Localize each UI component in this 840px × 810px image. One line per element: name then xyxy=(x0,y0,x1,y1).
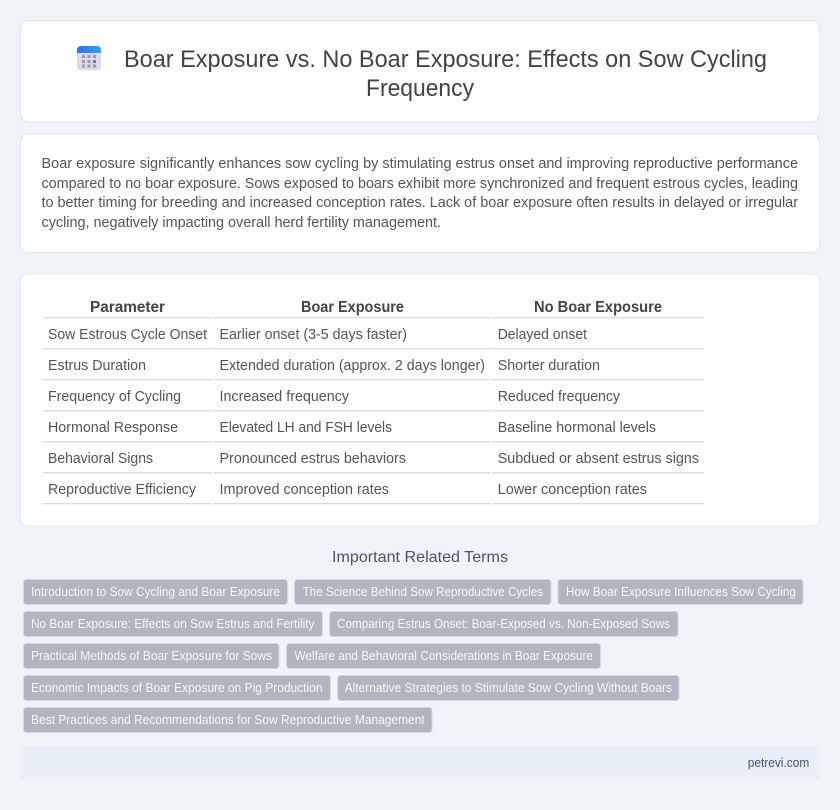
panel: title header xyxy=(20,20,820,122)
tag xyxy=(330,612,678,636)
table row: Estrus Duration: Estrus Duration xyxy=(48,358,146,374)
table row: Hormonal Response: Baseline hormonal levels xyxy=(498,420,656,436)
table row: Sow Estrous Cycle Onset xyxy=(48,327,587,343)
table row: Sow Estrous Cycle Onset: Sow Estrous Cycle Onset xyxy=(48,327,207,343)
tag xyxy=(24,580,288,604)
table row: Sow Estrous Cycle Onset: Earlier onset (3-5 days faster) xyxy=(220,327,407,343)
footer source text: petrevi.com xyxy=(748,756,809,770)
tag xyxy=(286,644,600,668)
text block: introduction paragraph: compared to no boar exposure. Sows exposed to boars exhibit more synchronized and frequent estrous cycles, leading xyxy=(42,176,798,192)
tag xyxy=(24,644,279,668)
table row: Behavioral Signs: Subdued or absent estrus signs xyxy=(498,451,699,467)
title: Frequency xyxy=(366,75,474,102)
tag: Practical Methods of Boar Exposure for Sows xyxy=(31,649,272,663)
tag: How Boar Exposure Influences Sow Cycling xyxy=(566,585,796,599)
table row: Behavioral Signs xyxy=(48,451,699,467)
panel: comparison table xyxy=(20,274,820,526)
table row: Behavioral Signs: Pronounced estrus behaviors xyxy=(220,451,406,467)
title xyxy=(124,46,767,102)
table header row xyxy=(90,299,662,316)
text block: introduction paragraph: to better timing for breeding and increased conception rates. Lack of boar exposure often results in delayed or irregular xyxy=(42,195,798,211)
tag: Alternative Strategies to Stimulate Sow Cycling Without Boars xyxy=(345,681,672,695)
icon: calendar xyxy=(77,46,101,70)
tag xyxy=(24,708,432,732)
text block: introduction paragraph: cycling, negatively impacting overall herd fertility management. xyxy=(42,215,441,231)
table row: Frequency of Cycling xyxy=(48,389,621,405)
table row: Behavioral Signs: Behavioral Signs xyxy=(48,451,153,467)
text block: introduction paragraph xyxy=(42,156,798,231)
table header row: Boar Exposure xyxy=(301,299,404,316)
table row: Reproductive Efficiency: Improved conception rates xyxy=(220,482,389,498)
panel: introduction xyxy=(20,134,820,252)
heading: Important Related Terms: Important Related Terms xyxy=(332,549,508,566)
footer xyxy=(20,746,820,780)
tag: No Boar Exposure: Effects on Sow Estrus and Fertility xyxy=(31,617,315,631)
table header row: Parameter xyxy=(90,299,165,316)
title: Boar Exposure vs. No Boar Exposure: Effects on Sow Cycling xyxy=(124,46,767,73)
table row: Hormonal Response: Elevated LH and FSH levels xyxy=(220,420,392,436)
tag: The Science Behind Sow Reproductive Cycles xyxy=(303,585,543,599)
table row: Hormonal Response: Hormonal Response xyxy=(48,420,178,436)
table row: Hormonal Response xyxy=(48,420,656,436)
tag: Welfare and Behavioral Considerations in Boar Exposure xyxy=(294,649,593,663)
tag xyxy=(558,580,803,604)
table row: Reproductive Efficiency: Lower conception rates xyxy=(498,482,647,498)
tag xyxy=(338,676,679,700)
table row: Frequency of Cycling: Reduced frequency xyxy=(498,389,621,405)
table header row: No Boar Exposure xyxy=(534,299,662,316)
table row: Frequency of Cycling: Increased frequency xyxy=(220,389,350,405)
tag: Best Practices and Recommendations for Sow Reproductive Management xyxy=(31,713,425,727)
tag xyxy=(24,612,322,636)
tag xyxy=(294,580,551,604)
table row: Estrus Duration: Shorter duration xyxy=(498,358,600,374)
tag: Introduction to Sow Cycling and Boar Exposure xyxy=(31,585,280,599)
tag xyxy=(24,676,330,700)
table row: Estrus Duration xyxy=(48,358,600,374)
table row: Reproductive Efficiency: Reproductive Efficiency xyxy=(48,482,197,498)
table row: Reproductive Efficiency xyxy=(48,482,647,498)
table row: Frequency of Cycling: Frequency of Cycling xyxy=(48,389,181,405)
text block: introduction paragraph: Boar exposure significantly enhances sow cycling by stimulating estrus onset and improving reproductive performance xyxy=(42,156,798,172)
table row: Sow Estrous Cycle Onset: Delayed onset xyxy=(498,327,587,343)
panel: related term tags xyxy=(24,580,803,732)
tag: Economic Impacts of Boar Exposure on Pig Production xyxy=(31,681,323,695)
table row: Estrus Duration: Extended duration (approx. 2 days longer) xyxy=(220,358,485,374)
tag: Comparing Estrus Onset: Boar-Exposed vs. Non-Exposed Sows xyxy=(337,617,670,631)
